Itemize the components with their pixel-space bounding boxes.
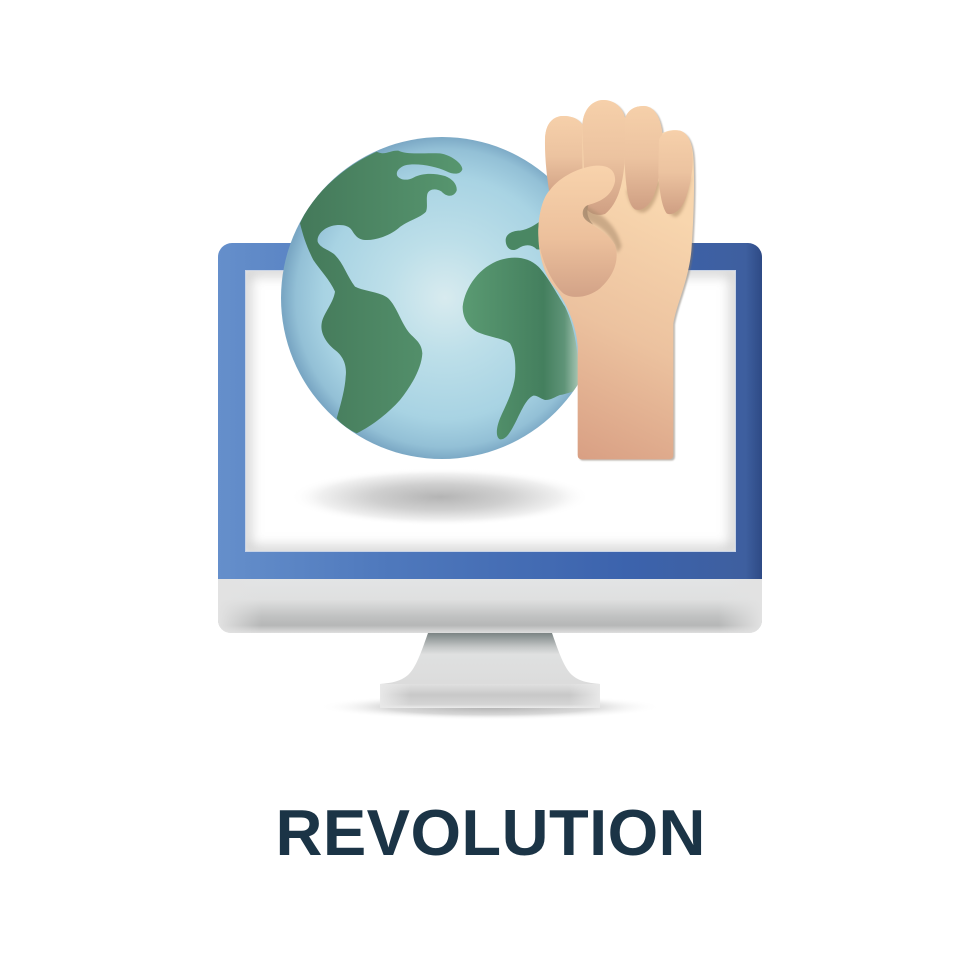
globe sea xyxy=(281,137,603,459)
monitor stand shadow xyxy=(318,694,662,720)
monitor stand neck xyxy=(380,633,600,684)
icon: desktop monitor xyxy=(218,243,762,720)
monitor blue frame xyxy=(218,243,762,580)
continent: left landmass xyxy=(300,151,462,433)
title: REVOLUTION xyxy=(276,796,706,869)
infographic illustration xyxy=(218,100,762,856)
monitor stand base xyxy=(380,684,600,708)
finger: ring xyxy=(625,106,662,210)
thumb knuckle fold xyxy=(583,205,593,225)
thumb xyxy=(538,166,617,297)
continent: right landmass xyxy=(463,258,578,439)
finger: index xyxy=(545,116,583,197)
finger shadows xyxy=(627,177,691,217)
finger: middle xyxy=(582,100,625,215)
thumb fold shadow xyxy=(583,205,622,253)
monitor grey chin xyxy=(218,579,762,633)
monitor screen xyxy=(245,270,736,552)
icon: raised fist xyxy=(538,100,696,461)
shadow under globe xyxy=(290,468,590,526)
fist wrist and palm xyxy=(538,100,694,459)
fist drop shadow xyxy=(540,101,696,461)
continent: small island xyxy=(506,222,540,250)
icon: globe xyxy=(281,137,603,459)
finger: little xyxy=(658,130,693,214)
